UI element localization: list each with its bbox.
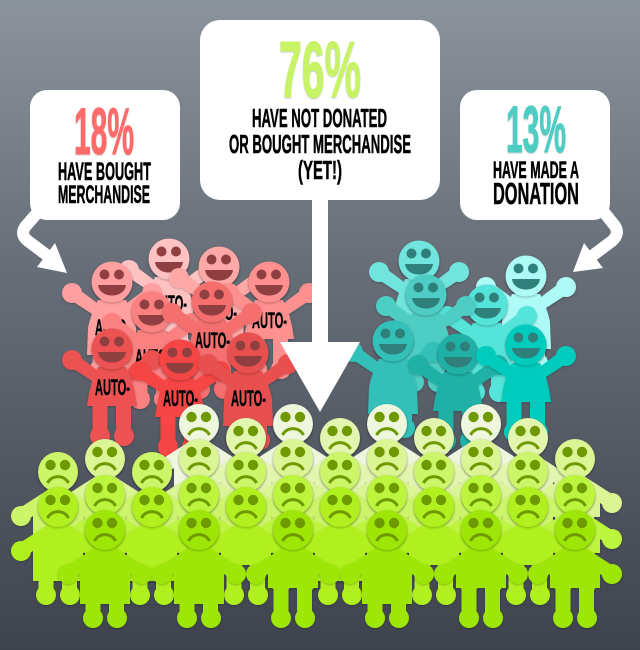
person: red 8 xyxy=(130,340,230,457)
person: red 3 xyxy=(62,262,162,379)
label: have not donated: HAVE NOT DONATED xyxy=(252,103,387,133)
row 3 of green people xyxy=(58,439,622,557)
person: red 1 xyxy=(119,238,219,356)
row 7 of green people xyxy=(58,510,622,628)
person: teal 4 xyxy=(376,274,476,392)
arrow: right curved arrow xyxy=(573,211,617,272)
person: red 1: AUTO- xyxy=(152,291,187,316)
person: red 2: AUTO- xyxy=(202,300,237,325)
person: teal 5 xyxy=(343,320,443,438)
group: teal donors xyxy=(343,240,576,451)
person: red 5 xyxy=(102,292,202,409)
person: red 2 xyxy=(169,246,269,364)
row 1 of green people xyxy=(152,404,528,522)
person: red 7 xyxy=(62,328,162,446)
person: teal 3 xyxy=(437,284,537,402)
group: red merchandise buyers xyxy=(62,238,319,457)
label: have bought merchandise xyxy=(58,158,151,209)
callout: 13% donation: 13% xyxy=(506,92,566,166)
person: red 5: AUTO- xyxy=(135,345,170,370)
label: have not donated xyxy=(229,103,411,185)
person: red 6 xyxy=(162,282,262,399)
row 5 of green people xyxy=(58,475,622,593)
stat: 76%: 76% xyxy=(279,25,361,114)
label: have not donated: OR BOUGHT MERCHANDISE xyxy=(229,129,411,159)
callout: 18% merchandise xyxy=(30,90,180,220)
callout: 18% merchandise: MERCHANDISE xyxy=(58,181,150,209)
row 2 of green people xyxy=(199,418,575,536)
group: green non-participants xyxy=(11,404,622,628)
callout: 18% merchandise: 18% xyxy=(74,94,134,168)
person: teal 2 xyxy=(476,256,576,373)
person: teal 6 xyxy=(408,334,508,451)
row 6 of green people xyxy=(11,487,575,605)
person: red 9 xyxy=(198,332,298,450)
person: red 4: AUTO- xyxy=(252,308,287,333)
person: teal 1 xyxy=(369,240,469,358)
callout: 13% donation xyxy=(460,90,610,220)
person: red 4 xyxy=(219,262,319,379)
person: teal 7 xyxy=(476,324,576,442)
person: red 8: AUTO- xyxy=(163,386,198,411)
person: red 3: AUTO- xyxy=(95,315,130,340)
label: have not donated: (YET!) xyxy=(298,155,342,185)
row 4 of green people xyxy=(11,452,575,570)
callout: 76% neither xyxy=(200,20,440,200)
label: have bought merchandise: HAVE BOUGHT xyxy=(58,158,151,186)
arrow: left curved arrow xyxy=(23,212,67,273)
person: red 9: AUTO- xyxy=(231,386,266,411)
arrow: center down arrow xyxy=(280,198,360,412)
person: red 7: AUTO- xyxy=(95,375,130,400)
label: have made a donation xyxy=(493,157,579,211)
person: red 6: AUTO- xyxy=(195,328,230,353)
